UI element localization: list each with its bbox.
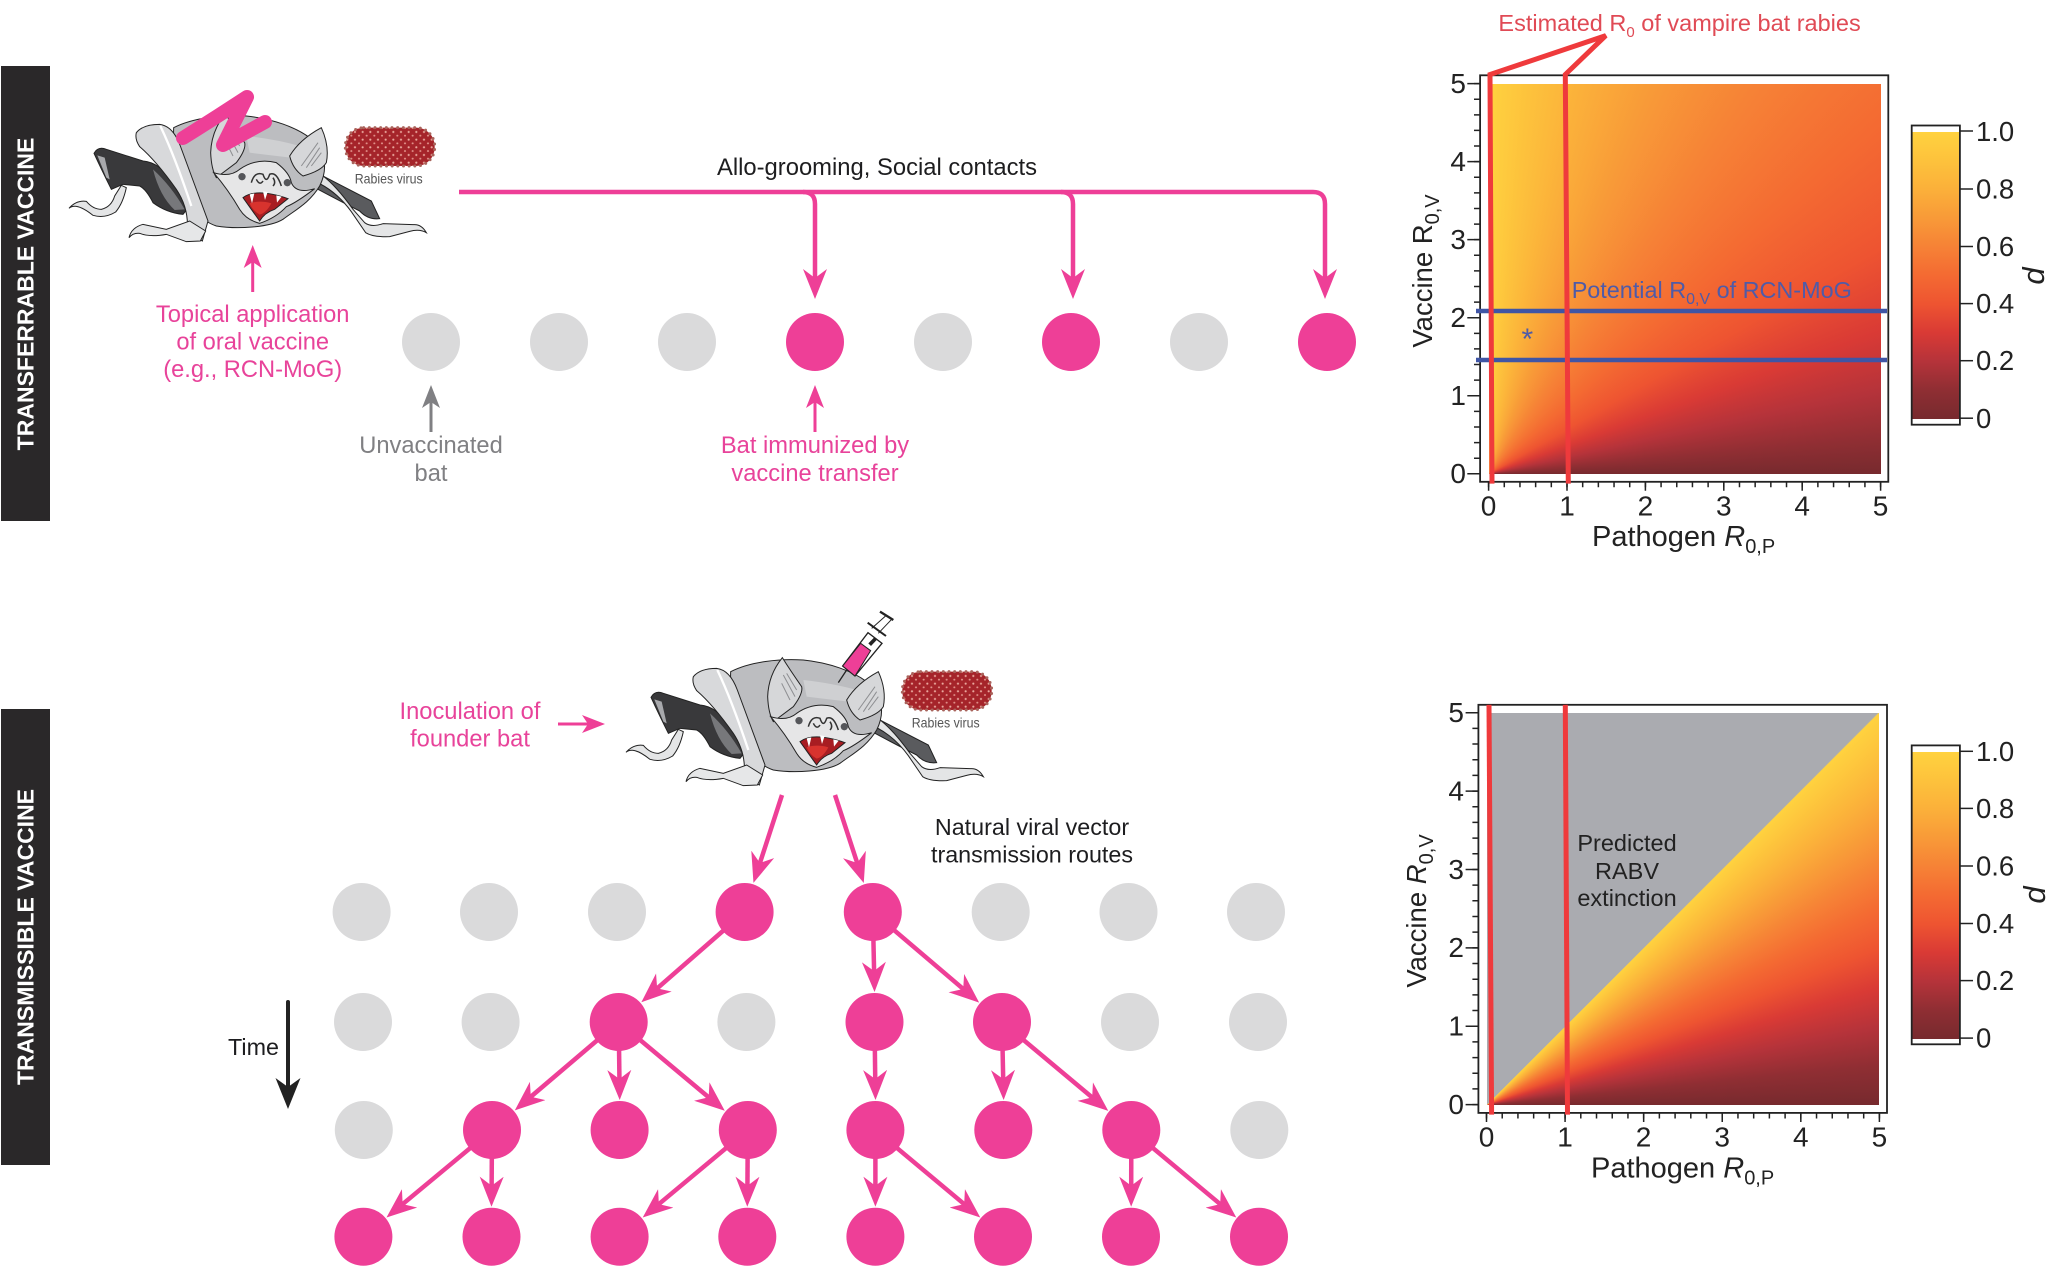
text: allo-grooming: Allo-grooming, Social contacts [717, 154, 1037, 181]
x axis numbers: 4 [1794, 491, 1810, 522]
text: predicted extinction: Predicted [1577, 830, 1677, 856]
colour scale: transmissible vaccine: 0 [1976, 1022, 1991, 1054]
text: natural routes: transmission routes [931, 842, 1133, 868]
colour scale: transmissible vaccine: 0.4 [1976, 908, 2014, 939]
red lines: estimated R0 [1490, 36, 1606, 484]
x axis numbers: 2 [1636, 1122, 1651, 1153]
colour scale: transferrable vaccine [1912, 116, 2048, 434]
text: inoculation: Inoculation of [400, 699, 541, 725]
icon: founder bat with syringe: Rabies virus [912, 714, 980, 730]
colour scale: transferrable vaccine: 0 [1976, 403, 1991, 434]
icon: founder bat with syringe [626, 612, 992, 786]
y axis label: Vaccine R [1407, 224, 1438, 348]
y axis numbers: 1 [1448, 1010, 1464, 1042]
x axis numbers: 4 [1793, 1122, 1809, 1153]
y axis numbers: 4 [1450, 146, 1466, 177]
x axis numbers: 5 [1873, 491, 1888, 522]
arrow: inoculation [558, 722, 592, 726]
text: bat immunized: Bat immunized by [721, 433, 909, 459]
panel: transmissible vaccine label [1, 709, 50, 1165]
asterisk: * [1522, 323, 1534, 356]
icon: bat with topical vaccine [69, 97, 435, 242]
x axis label: Pathogen R [1591, 1153, 1744, 1185]
x axis numbers: 0 [1481, 491, 1496, 522]
panel: transmissible vaccine label: TRANSMISSIBLE VACCINE [12, 789, 38, 1085]
y axis numbers: 0 [1448, 1089, 1464, 1120]
arrow: bat immunized [814, 398, 816, 432]
text: bat immunized: vaccine transfer [731, 461, 899, 487]
colour scale: transferrable vaccine: 0.6 [1976, 231, 2014, 262]
colour scale: transferrable vaccine: 0.8 [1976, 174, 2014, 204]
text: unvaccinated bat: Unvaccinated [359, 433, 503, 459]
y axis numbers: 2 [1450, 302, 1466, 333]
colour bar: transferrable vaccine [1912, 132, 1960, 419]
y axis numbers: 3 [1448, 854, 1464, 885]
colour scale: transmissible vaccine: 0.6 [1976, 850, 2014, 882]
colour scale: transmissible vaccine: 0.8 [1976, 793, 2014, 824]
arrow: time [286, 1002, 290, 1092]
x axis numbers: 3 [1714, 1122, 1730, 1153]
colour scale: transferrable vaccine: 0.4 [1976, 288, 2014, 319]
panel: transferrable vaccine label: TRANSFERRABLE VACCINE [12, 138, 38, 450]
y axis numbers: 5 [1448, 697, 1464, 728]
arrows: transfer branches [459, 192, 1325, 283]
text: estimated R0: 0 [1626, 24, 1635, 41]
text: unvaccinated bat: bat [415, 461, 448, 487]
text: time: Time [228, 1034, 279, 1060]
x axis numbers: 1 [1557, 1122, 1573, 1153]
red lines [1489, 705, 1568, 1115]
y axis label: 0,V [1422, 194, 1444, 224]
heat map: transferrable vaccine [1489, 84, 1881, 474]
blue lines: RCN-MoG range [1476, 311, 1887, 360]
arrow: unvaccinated bat [430, 398, 432, 432]
text: estimated R0: of vampire bat rabies [1635, 10, 1861, 36]
heat map: transmissible vaccine [1486, 713, 1879, 1105]
row: transferrable bats [402, 313, 1356, 371]
x axis label: Pathogen R [1592, 521, 1745, 553]
text: predicted extinction: extinction [1577, 885, 1677, 911]
x axis numbers: 5 [1872, 1122, 1887, 1153]
x axis numbers [1479, 1122, 1887, 1153]
y axis label: Vaccine R [1401, 864, 1432, 988]
y axis label: 0,V [1416, 834, 1438, 864]
x axis label: 0,P [1745, 536, 1775, 558]
x axis label: 0,P [1744, 1168, 1774, 1190]
y axis numbers [1450, 68, 1466, 489]
y axis numbers: 3 [1450, 224, 1466, 255]
text: natural routes: Natural viral vector [935, 814, 1129, 840]
y axis numbers: 1 [1450, 380, 1466, 411]
text: predicted extinction: RABV [1595, 858, 1659, 884]
colour scale: transmissible vaccine: 1.0 [1976, 736, 2014, 767]
text: potential R0,V: Potential R [1572, 277, 1686, 303]
colour scale: transferrable vaccine: 1.0 [1976, 116, 2014, 147]
y axis numbers: 0 [1450, 458, 1466, 489]
y axis numbers: 2 [1448, 932, 1464, 963]
x axis numbers [1481, 491, 1888, 522]
text: potential R0,V: 0,V [1686, 291, 1710, 308]
colour scale: transmissible vaccine: 0.2 [1976, 965, 2014, 996]
plot: transferrable vaccine [1407, 10, 1888, 558]
x axis numbers: 3 [1716, 491, 1732, 522]
x axis numbers: 0 [1479, 1122, 1494, 1153]
y axis numbers: 5 [1450, 68, 1466, 99]
y axis numbers: 4 [1448, 776, 1464, 806]
text: topical application: (e.g., RCN-MoG) [163, 357, 342, 383]
text: topical application: Topical application [156, 302, 349, 328]
plot: transmissible vaccine [1401, 697, 1887, 1190]
y axis numbers [1448, 697, 1464, 1120]
text: topical application: of oral vaccine [176, 330, 329, 356]
x axis numbers: 2 [1638, 491, 1653, 522]
text: inoculation: founder bat [410, 726, 530, 752]
colour scale: transmissible vaccine [1912, 736, 2048, 1054]
arrows: transmission tree [399, 795, 1224, 1207]
text: estimated R0: Estimated R [1498, 10, 1626, 36]
colour bar: transmissible vaccine [1912, 752, 1960, 1039]
text: potential R0,V: of RCN-MoG [1710, 277, 1852, 303]
panel: transferrable vaccine label [1, 66, 50, 521]
colour scale: transferrable vaccine: 0.2 [1976, 345, 2014, 376]
arrow: topical application [251, 258, 254, 292]
grid: transmissible bats [333, 883, 1288, 1266]
icon: bat with topical vaccine: Rabies virus [355, 170, 423, 186]
x axis numbers: 1 [1559, 491, 1575, 522]
